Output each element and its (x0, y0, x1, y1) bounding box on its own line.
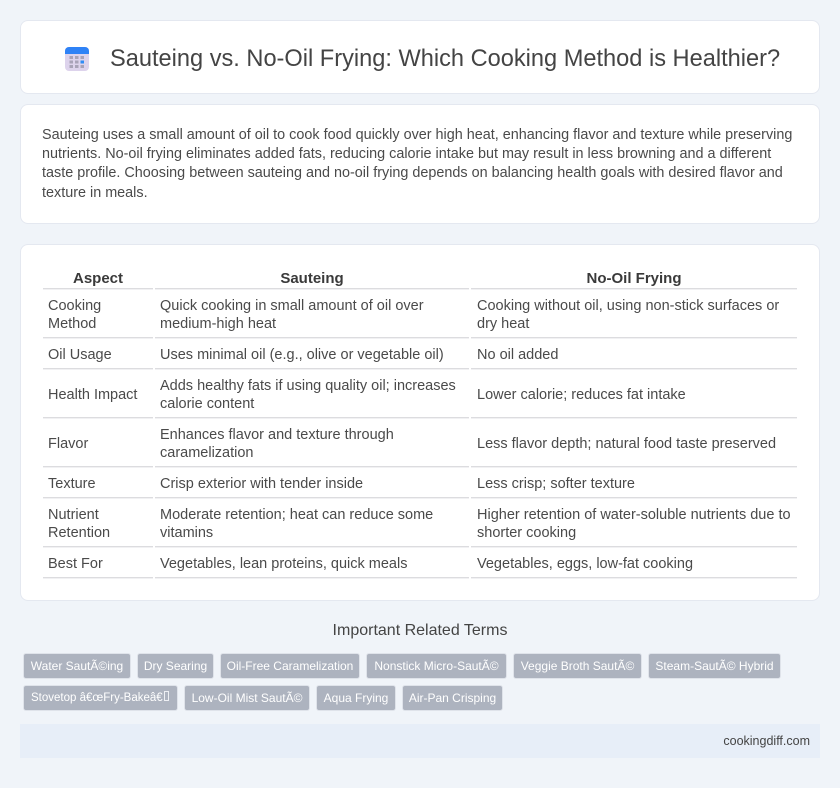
table content: Quick cooking in small amount of oil over (160, 298, 424, 314)
related terms tags: Air-Pan Crisping (409, 691, 496, 705)
table content: No-Oil Frying (586, 270, 682, 287)
related terms tags: Veggie Broth SautÃ© (521, 659, 634, 673)
related terms tags (23, 653, 781, 711)
table content: calorie content (160, 396, 254, 412)
table content: Nutrient (48, 507, 99, 523)
table content: Cooking without oil, using non-stick surfaces or (477, 298, 779, 314)
table content: caramelization (160, 445, 254, 461)
related terms tags: Oil-Free Caramelization (227, 659, 353, 673)
table content: Health Impact (48, 387, 137, 403)
table content: Flavor (48, 436, 88, 452)
table content: Adds healthy fats if using quality oil; increases (160, 378, 456, 394)
table content: Moderate retention; heat can reduce some (160, 507, 433, 523)
related terms tags: Water SautÃ©ing (31, 659, 123, 673)
related terms tags: Steam-SautÃ© Hybrid (655, 659, 774, 673)
table content: Aspect (73, 270, 123, 287)
related terms tags: Nonstick Micro-SautÃ© (374, 659, 499, 673)
icon: calendar (65, 47, 89, 71)
table content: Vegetables, lean proteins, quick meals (160, 556, 407, 572)
table content: Texture (48, 476, 96, 492)
table content: Crisp exterior with tender inside (160, 476, 363, 492)
table content: dry heat (477, 316, 529, 332)
related terms tags: Aqua Frying (324, 691, 388, 705)
table content: Sauteing (280, 270, 344, 287)
related terms tags: Dry Searing (144, 659, 207, 673)
table content: Less crisp; softer texture (477, 476, 635, 492)
intro paragraph (42, 126, 792, 201)
table content: vitamins (160, 525, 213, 541)
table content: No oil added (477, 347, 558, 363)
footer bar (20, 724, 820, 758)
table content: Best For (48, 556, 103, 572)
table content: Vegetables, eggs, low-fat cooking (477, 556, 693, 572)
table content: medium-high heat (160, 316, 276, 332)
intro paragraph: taste profile. Choosing between sauteing and no-oil frying depends on balancing health goals with desired flavor and (42, 165, 783, 181)
related terms tags: Stovetop â€œFry-Bakeâ€ (31, 692, 163, 704)
related terms heading: Important Related Terms (333, 622, 507, 639)
table content: shorter cooking (477, 525, 576, 541)
intro paragraph: nutrients. No-oil frying eliminates added fats, reducing calorie intake but may result in less browning and a different (42, 146, 771, 162)
table content: Oil Usage (48, 347, 112, 363)
intro text panel (20, 104, 820, 224)
comparison table panel (20, 244, 820, 601)
title: Sauteing vs. No-Oil Frying: Which Cooking Method is Healthier? (110, 46, 780, 72)
header panel (20, 20, 820, 94)
intro paragraph: Sauteing uses a small amount of oil to cook food quickly over high heat, enhancing flavor and texture while preserving (42, 126, 792, 142)
table content: Uses minimal oil (e.g., olive or vegetable oil) (160, 347, 444, 363)
intro paragraph: texture in meals. (42, 185, 148, 201)
table content: Cooking (48, 298, 101, 314)
table content: Lower calorie; reduces fat intake (477, 387, 686, 403)
table content: Higher retention of water-soluble nutrients due to (477, 507, 791, 523)
table content: Less flavor depth; natural food taste preserved (477, 436, 776, 452)
related terms tags: Low-Oil Mist SautÃ© (192, 691, 302, 705)
footer source text: cookingdiff.com (723, 734, 810, 748)
table content: Retention (48, 525, 110, 541)
table content: Method (48, 316, 96, 332)
table content: Enhances flavor and texture through (160, 427, 394, 443)
